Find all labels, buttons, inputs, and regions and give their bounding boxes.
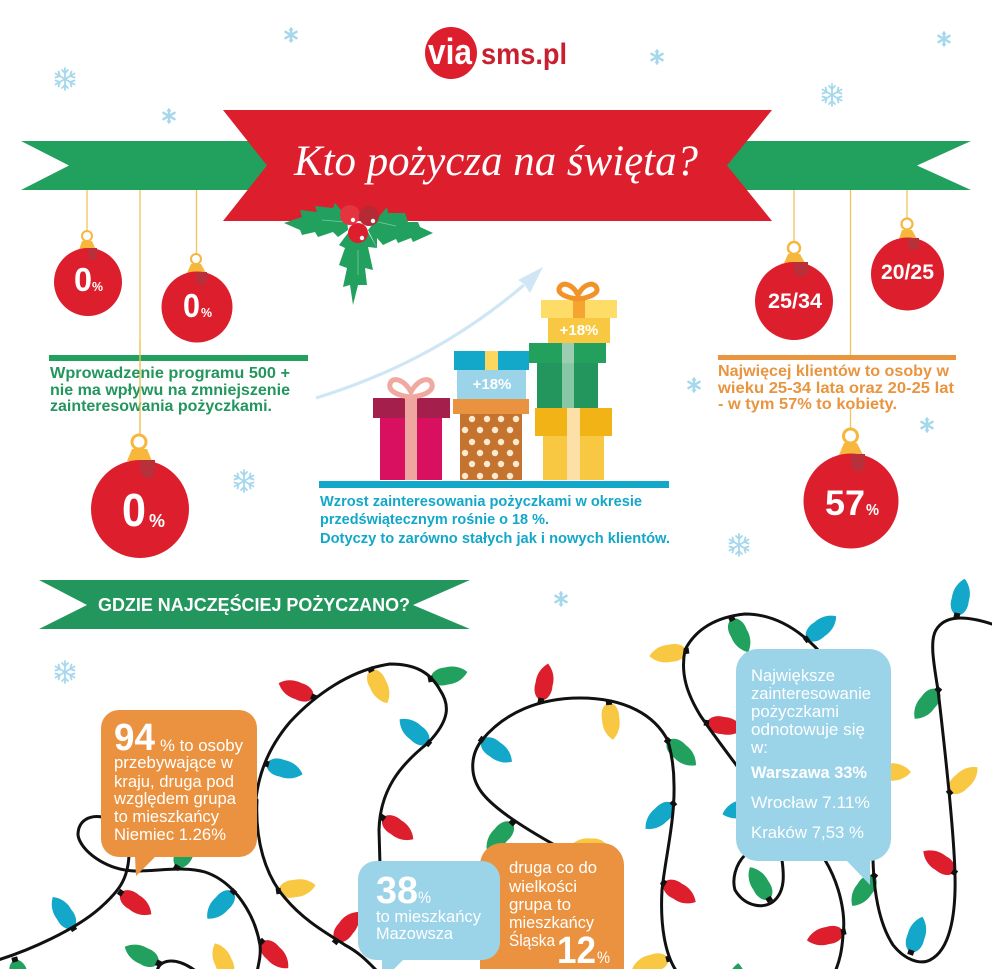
callout: 94%: względem grupa xyxy=(113,789,237,808)
callout: 94%: przebywające w xyxy=(114,753,234,772)
bauble: 0%: % xyxy=(92,279,103,294)
panel: program 500+: Wprowadzenie programu 500 + xyxy=(50,365,290,382)
logo: viasms.pl: via xyxy=(428,31,473,72)
bauble: 20/25 xyxy=(871,218,944,310)
callout: 94%: to mieszkańcy xyxy=(114,807,219,826)
bauble: 0%: % xyxy=(201,305,212,320)
callout: 12% Śląsk: Śląska xyxy=(509,931,555,950)
callout: 12% Śląsk: druga co do xyxy=(509,858,597,877)
title ribbon xyxy=(21,110,971,221)
bauble: 0%: 0 xyxy=(183,287,200,324)
gift: brown dotted xyxy=(453,399,529,480)
bauble: 25/34: 25/34 xyxy=(768,289,822,313)
callout: 38% Mazowsze: % xyxy=(418,888,431,907)
gift: blue +18% xyxy=(454,351,529,399)
callout: 94% xyxy=(101,710,257,876)
hanging strings xyxy=(87,190,907,436)
gift: pink xyxy=(373,380,450,480)
panel: growth text: przedświątecznym rośnie o 18 %. xyxy=(320,511,549,528)
panel: growth text: Wzrost zainteresowania pożyczkami w okresie xyxy=(320,493,642,510)
bauble: 0% xyxy=(162,254,232,342)
panel: program 500+: nie ma wpływu na zmniejszenie xyxy=(50,382,290,399)
bauble: large 0%: 0 xyxy=(122,484,146,536)
panel: clients age: - w tym 57% to kobiety. xyxy=(718,396,897,413)
callout: największe zainteresowanie: zainteresowanie xyxy=(751,684,871,703)
callout: największe zainteresowanie: Największe xyxy=(751,666,835,685)
string lights xyxy=(0,577,992,969)
title: Kto pożycza na święta? xyxy=(293,138,698,185)
panel: growth text: Dotyczy to zarówno stałych jak i nowych klientów. xyxy=(320,530,670,547)
callout: 12% Śląsk: % xyxy=(597,948,610,967)
bauble: large 0% xyxy=(91,435,189,558)
bauble: 20/25: 20/25 xyxy=(881,260,934,284)
bulbs: green xyxy=(6,612,947,969)
callout: największe zainteresowanie: w: xyxy=(750,738,768,757)
bauble: 0% xyxy=(54,231,122,316)
callout: 12% Śląsk: grupa to xyxy=(509,895,571,914)
bulbs: blue xyxy=(45,577,973,958)
callout: 94%: 94 xyxy=(114,717,155,759)
logo: viasms.pl: sms.pl xyxy=(481,38,567,71)
panel: program 500+ xyxy=(49,355,308,415)
panel: clients age: Najwięcej klientów to osoby w xyxy=(718,363,950,380)
bauble: 0%: 0 xyxy=(74,261,92,298)
bauble: 57% xyxy=(804,429,898,548)
bauble: large 0%: % xyxy=(149,511,165,531)
bulbs: yellow xyxy=(207,642,983,969)
panel: growth text xyxy=(319,481,670,547)
callout: 12% Śląsk xyxy=(480,843,624,969)
gift: green xyxy=(529,343,606,408)
heading ribbon: gdzie najczęściej pożyczano: GDZIE NAJCZĘŚCIEJ POŻYCZANO? xyxy=(98,594,410,615)
chart: gift stack xyxy=(373,284,617,480)
bauble: 57%: % xyxy=(866,502,879,519)
callout: 38% Mazowsze: to mieszkańcy xyxy=(376,907,481,926)
callout: 94%: % to osoby xyxy=(160,736,243,755)
callout: największe zainteresowanie: Warszawa 33% xyxy=(751,763,867,782)
ribbon: left green tail xyxy=(21,141,270,190)
arrow: growth xyxy=(316,267,543,398)
panel: program 500+: zainteresowania pożyczkami. xyxy=(50,398,272,415)
callout: 12% Śląsk: wielkości xyxy=(508,877,577,896)
callout: 12% Śląsk: mieszkańcy xyxy=(509,913,594,932)
callout: 94%: Niemiec 1.26% xyxy=(114,825,226,844)
panel: clients age xyxy=(717,355,956,413)
bauble: 57%: 57 xyxy=(825,484,865,523)
callout: 38% Mazowsze: 38 xyxy=(376,870,418,912)
callout: największe zainteresowanie: odnotowuje się xyxy=(751,720,865,739)
snowflakes xyxy=(56,28,950,683)
callout: 94%: kraju, druga pod xyxy=(114,772,234,791)
ribbon: red centre xyxy=(223,110,772,221)
callout: największe zainteresowanie: Kraków 7,53 % xyxy=(751,823,864,842)
callout: największe zainteresowanie: Wrocław 7.11% xyxy=(751,793,870,812)
string: over text xyxy=(139,340,141,436)
panel: clients age: wieku 25-34 lata oraz 20-25 lat xyxy=(717,380,954,397)
icon: holly xyxy=(284,203,433,305)
callout: największe zainteresowanie: pożyczkami xyxy=(751,702,839,721)
callout: 38% Mazowsze: Mazowsza xyxy=(376,924,454,943)
gift: blue +18%: +18% xyxy=(473,376,511,393)
bulbs: red xyxy=(113,662,961,969)
heading ribbon: gdzie najczęściej pożyczano xyxy=(39,580,470,629)
bauble: 25/34 xyxy=(755,242,833,340)
callout: 38% Mazowsze xyxy=(358,861,500,969)
logo: viasms.pl xyxy=(425,27,567,79)
gift: yellow top +18% xyxy=(541,284,617,343)
gift: yellow top +18%: +18% xyxy=(560,322,598,339)
callout: największe zainteresowanie xyxy=(736,649,891,885)
ribbon: right green tail xyxy=(720,141,971,190)
wires xyxy=(0,614,992,969)
gift: yellow base xyxy=(535,408,612,480)
